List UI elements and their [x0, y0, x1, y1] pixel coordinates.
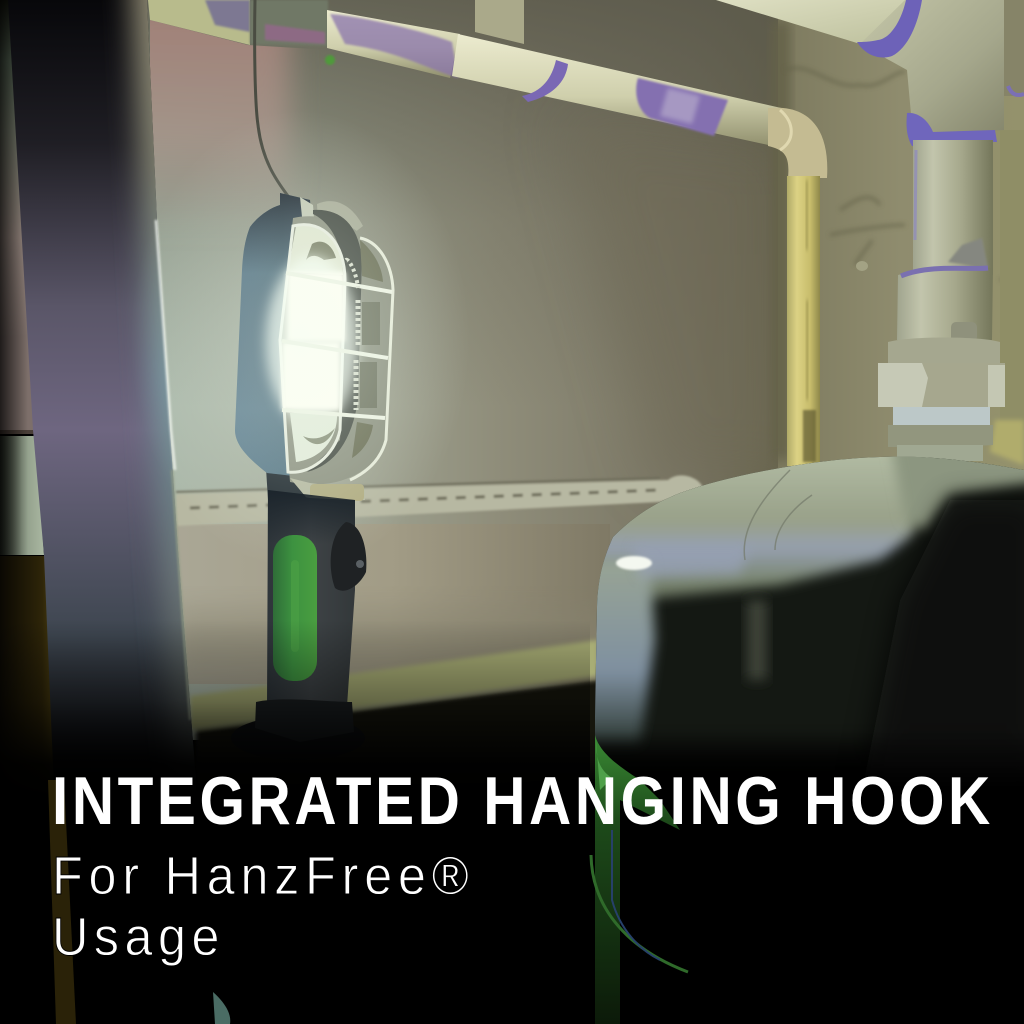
background wall — [147, 0, 778, 740]
lamp: green grip — [273, 535, 317, 681]
right vertical pipe and fittings — [878, 140, 1005, 461]
lamp: neck — [266, 468, 310, 500]
lamp: wire cage and light — [266, 197, 393, 502]
lamp: rear housing — [235, 193, 330, 480]
green indicator dot — [325, 55, 335, 65]
left strip with tan wall — [0, 0, 70, 1024]
lamp: soft glow halo — [130, 110, 470, 570]
left column — [9, 0, 194, 756]
subtitle: For HanzFree® — [52, 846, 469, 906]
pressure tank — [595, 456, 1024, 758]
lower horizontal pipe — [176, 475, 703, 526]
upper right pipe elbow — [716, 0, 1024, 146]
baseboard pipe — [190, 640, 600, 800]
dark fade under the tank — [590, 730, 1024, 800]
lamp: base — [231, 699, 365, 760]
lamp: power switch — [331, 522, 366, 591]
tank lower green band — [591, 735, 688, 1024]
small fitting at bottom edge — [213, 992, 230, 1024]
yellow conduit at lower left — [48, 780, 76, 1024]
top horizontal pipe — [148, 0, 827, 178]
subtitle — [52, 846, 469, 967]
subtitle: Usage — [52, 907, 219, 967]
title: INTEGRATED HANGING HOOK — [52, 764, 990, 839]
hanging hook wire — [255, 0, 288, 196]
lamp: handle — [267, 490, 366, 706]
bottom dark fade — [0, 620, 590, 800]
yellow vertical pipe — [787, 176, 820, 466]
right textured wall — [772, 0, 1024, 480]
